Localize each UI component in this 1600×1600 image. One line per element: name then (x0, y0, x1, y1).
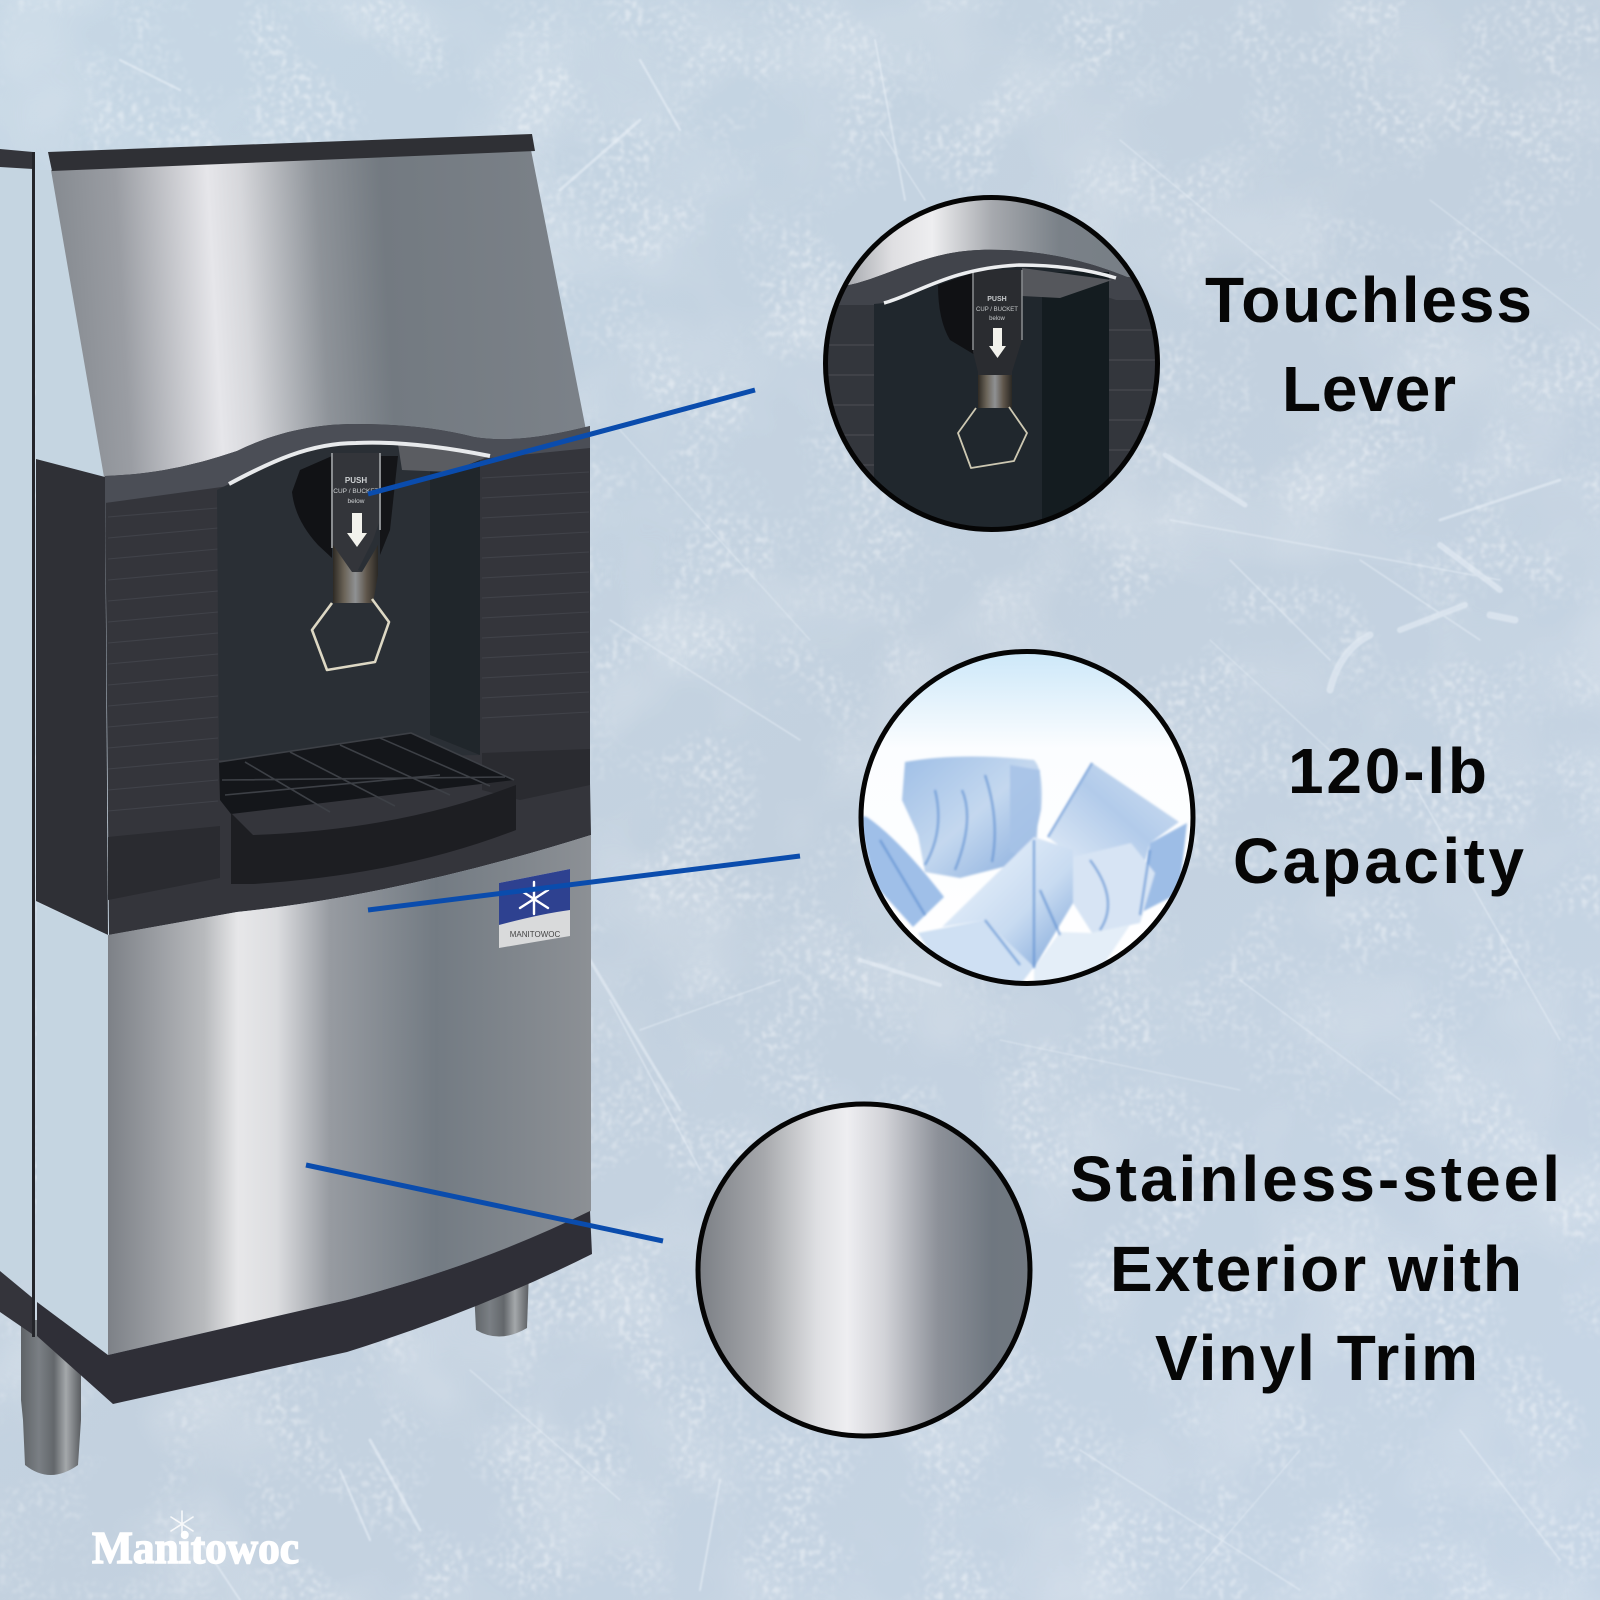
circle: stainless steel swatch (698, 1104, 1030, 1436)
machine: base trim (37, 1211, 592, 1404)
circle: touchless lever close-up: CUP / BUCKET (976, 307, 1018, 313)
machine: touchless lever: CUP / BUCKET (333, 488, 379, 495)
machine: brand badge: MANITOWOC (510, 930, 560, 939)
feature label: Touchless Lever (1205, 264, 1532, 425)
feature label: Touchless Lever: Touchless (1205, 264, 1532, 336)
machine: drip tray front (231, 785, 516, 884)
feature label: Stainless-steel Exterior with Vinyl Trim: Stainless-steel (1070, 1143, 1560, 1215)
machine: top trim (48, 134, 535, 171)
feature label: Stainless-steel Exterior with Vinyl Trim (1070, 1143, 1560, 1394)
blue pointer line: capacity (368, 856, 800, 910)
feature label: 120-lb Capacity: 120-lb (1288, 735, 1487, 807)
machine: lower stainless front (108, 835, 591, 1355)
feature label: Stainless-steel Exterior with Vinyl Trim: Exterior with (1110, 1233, 1522, 1305)
machine: touchless lever: PUSH (345, 476, 367, 485)
ice machine dispenser (0, 134, 592, 1475)
machine: chrome trim strip (229, 443, 490, 484)
blue pointer line: lever (368, 390, 755, 494)
circle: ice cubes (855, 645, 1200, 990)
machine: drip tray grid (219, 733, 514, 814)
feature label: Stainless-steel Exterior with Vinyl Trim: Vinyl Trim (1155, 1322, 1478, 1394)
machine: touchless lever (292, 453, 398, 670)
machine: side panel upper (36, 170, 104, 476)
circle: touchless lever close-up: below (989, 316, 1006, 322)
feature label: 120-lb Capacity: Capacity (1233, 825, 1524, 897)
feature label: Touchless Lever: Lever (1282, 353, 1456, 425)
machine: touchless lever: below (348, 498, 365, 505)
machine: dark dispenser body (36, 424, 591, 935)
circle: touchless lever close-up: PUSH (987, 296, 1007, 303)
machine: back leg (473, 1270, 529, 1337)
machine: front left leg (21, 1320, 81, 1475)
machine: brand badge (499, 869, 570, 948)
blue pointer line: exterior (306, 1165, 663, 1241)
feature label: 120-lb Capacity (1233, 735, 1524, 897)
brand logo: Manitowoc: Manitowoc (92, 1522, 299, 1573)
machine: stainless hopper front (51, 150, 586, 490)
machine: dispensing alcove (217, 443, 490, 760)
circle: touchless lever close-up (820, 190, 1170, 540)
machine: lower side panel (37, 903, 108, 1355)
machine: left tower (0, 149, 35, 1337)
